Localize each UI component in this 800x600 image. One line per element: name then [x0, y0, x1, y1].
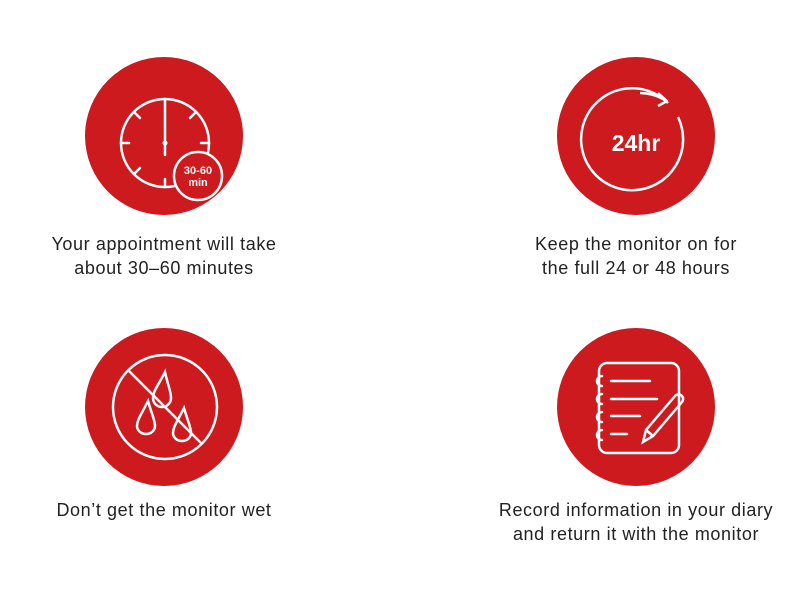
text: record diary: Record information in your diary	[499, 500, 773, 520]
icon: notebook	[557, 328, 715, 486]
text: keep monitor on: the full 24 or 48 hours	[542, 258, 730, 278]
icon: no water	[85, 328, 243, 486]
text: keep monitor on	[535, 234, 737, 278]
icon: 24hr	[557, 57, 715, 215]
text: keep monitor on: Keep the monitor on for	[535, 234, 737, 254]
text: don't get wet: Don’t get the monitor wet	[56, 500, 272, 520]
text: record diary	[499, 500, 773, 544]
text: appointment: about 30–60 minutes	[74, 258, 254, 278]
icon: 24hr: 24hr	[612, 130, 660, 156]
icon: clock: 30-60	[184, 165, 212, 177]
text: appointment	[51, 234, 277, 278]
text: appointment: Your appointment will take	[51, 234, 277, 254]
icon: clock	[85, 57, 243, 215]
icon: clock: min	[188, 177, 208, 189]
text: record diary: and return it with the monitor	[513, 524, 759, 544]
